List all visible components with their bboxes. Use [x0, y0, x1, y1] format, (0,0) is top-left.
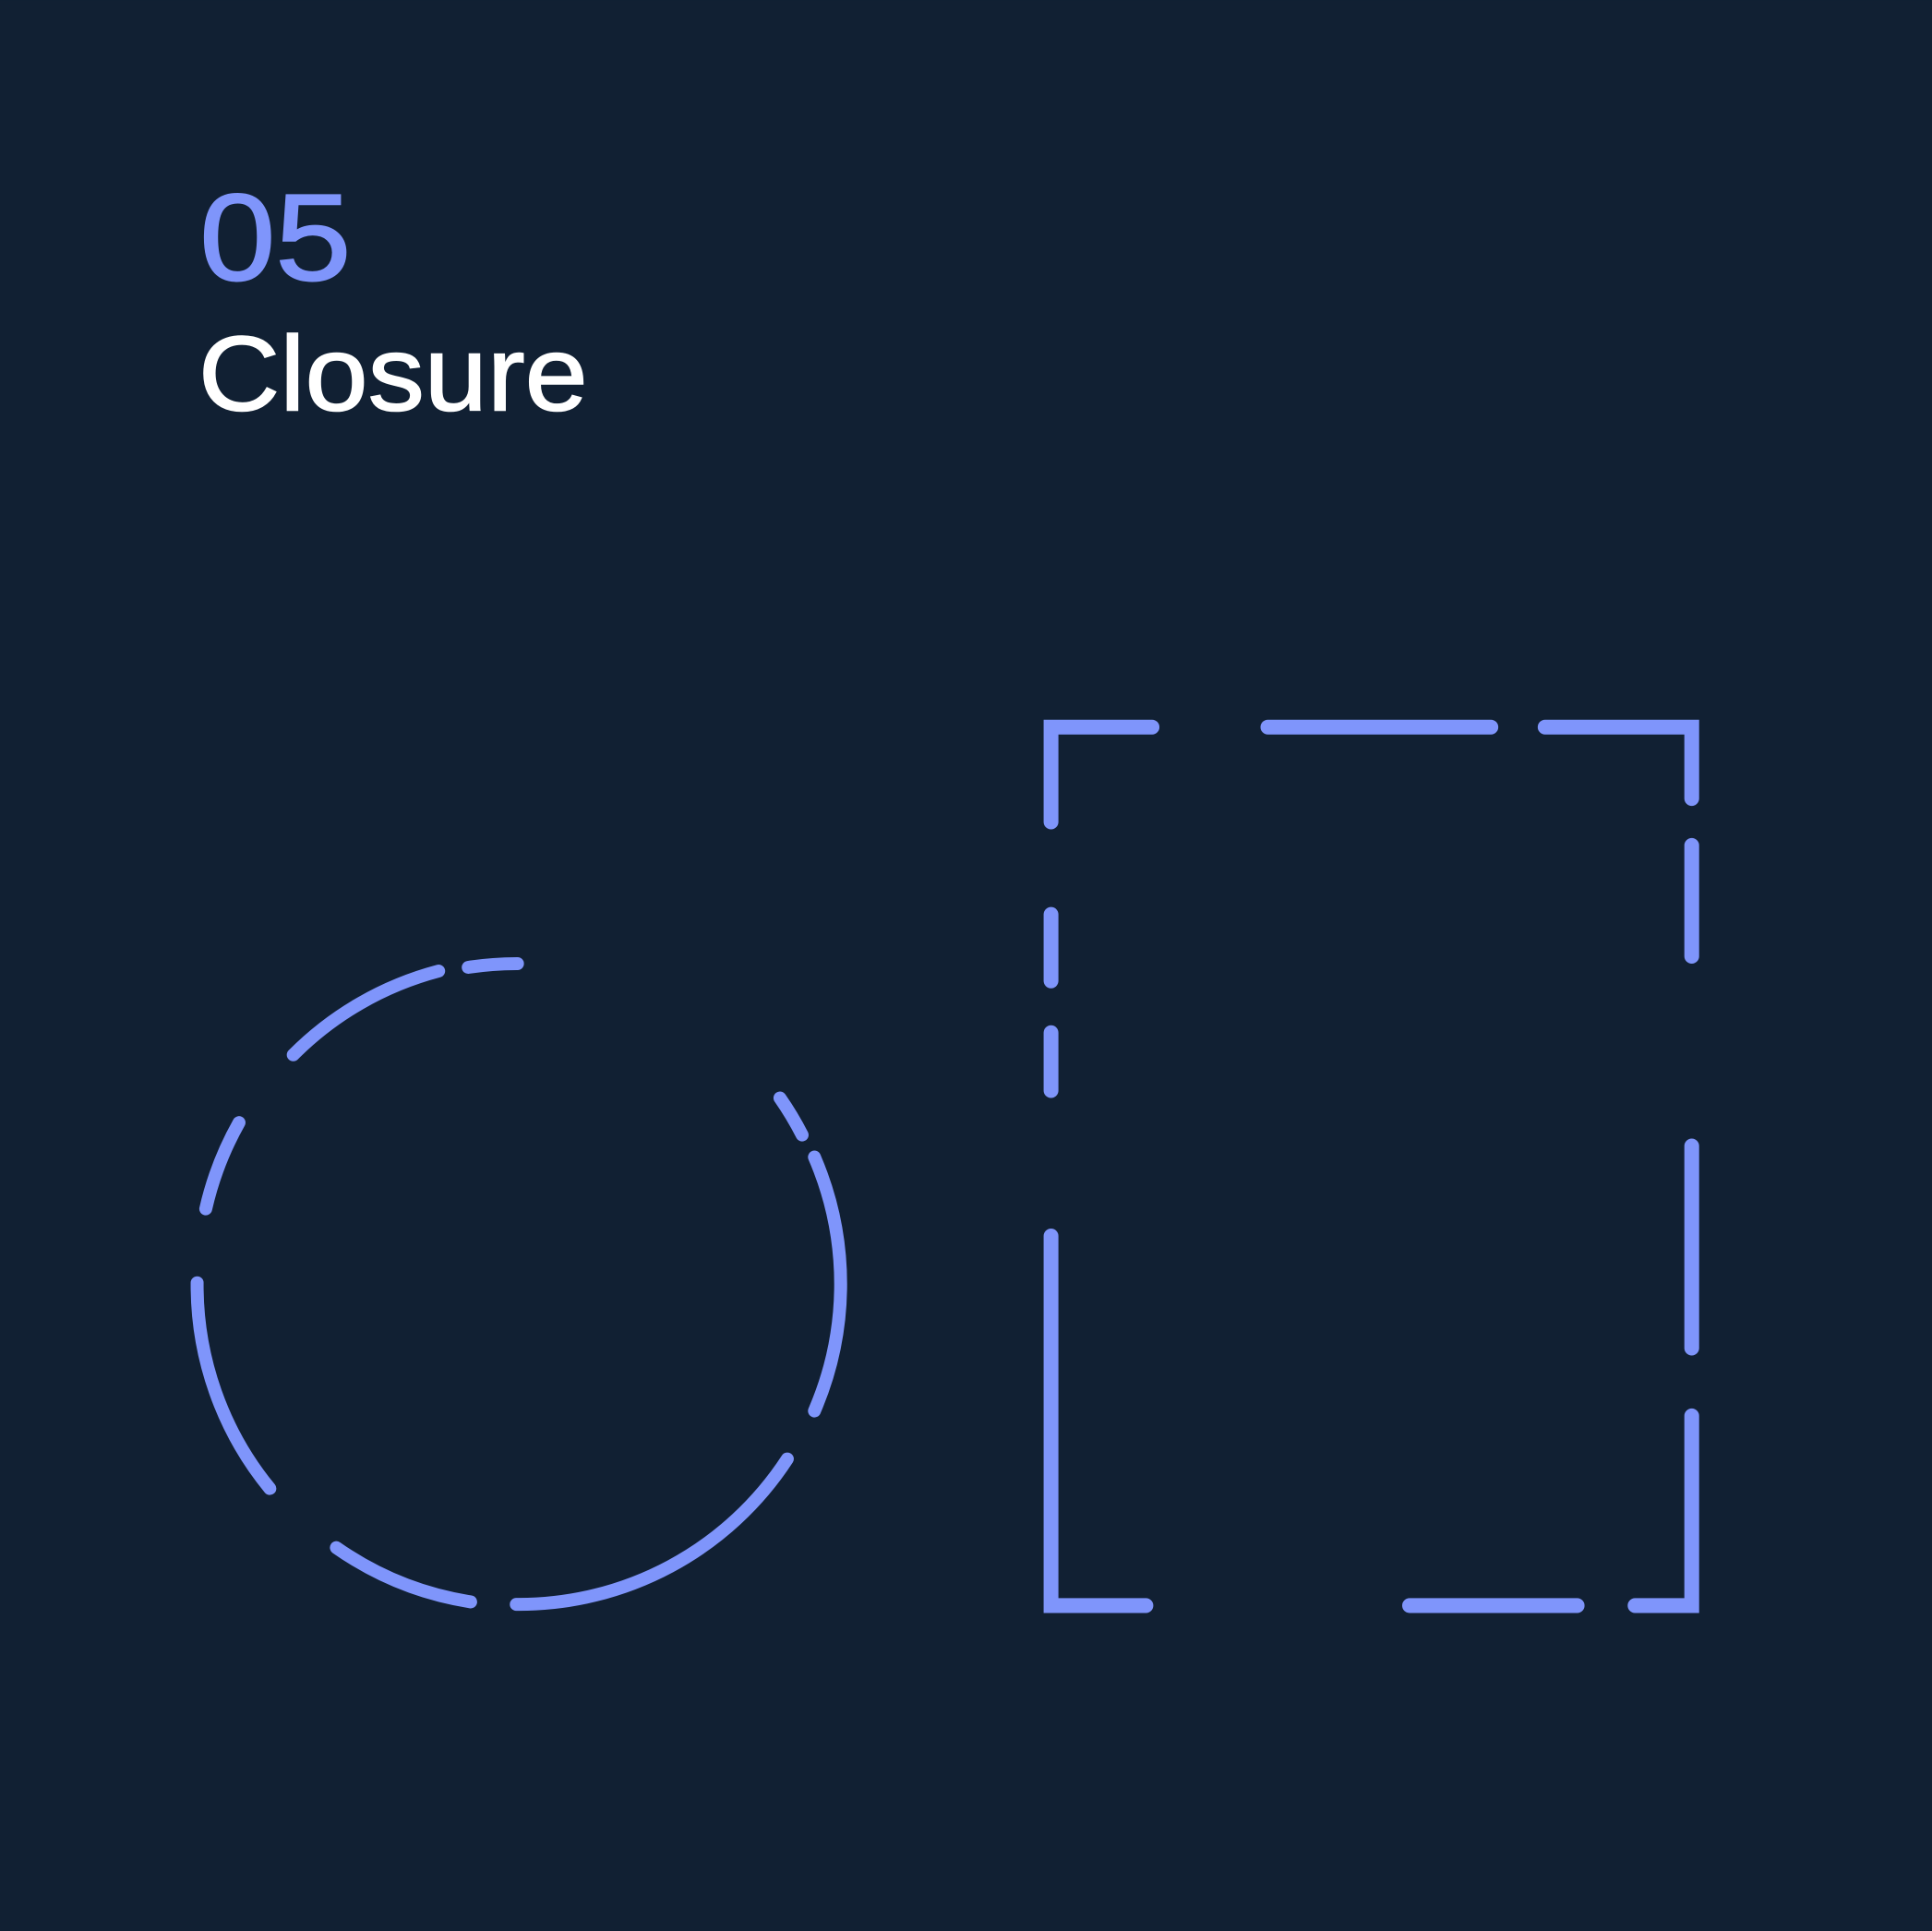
- dashed circle: [198, 964, 841, 1604]
- dashed square: [1051, 727, 1692, 1605]
- title heading: Closure: [198, 316, 588, 434]
- title number: 05: [199, 169, 351, 306]
